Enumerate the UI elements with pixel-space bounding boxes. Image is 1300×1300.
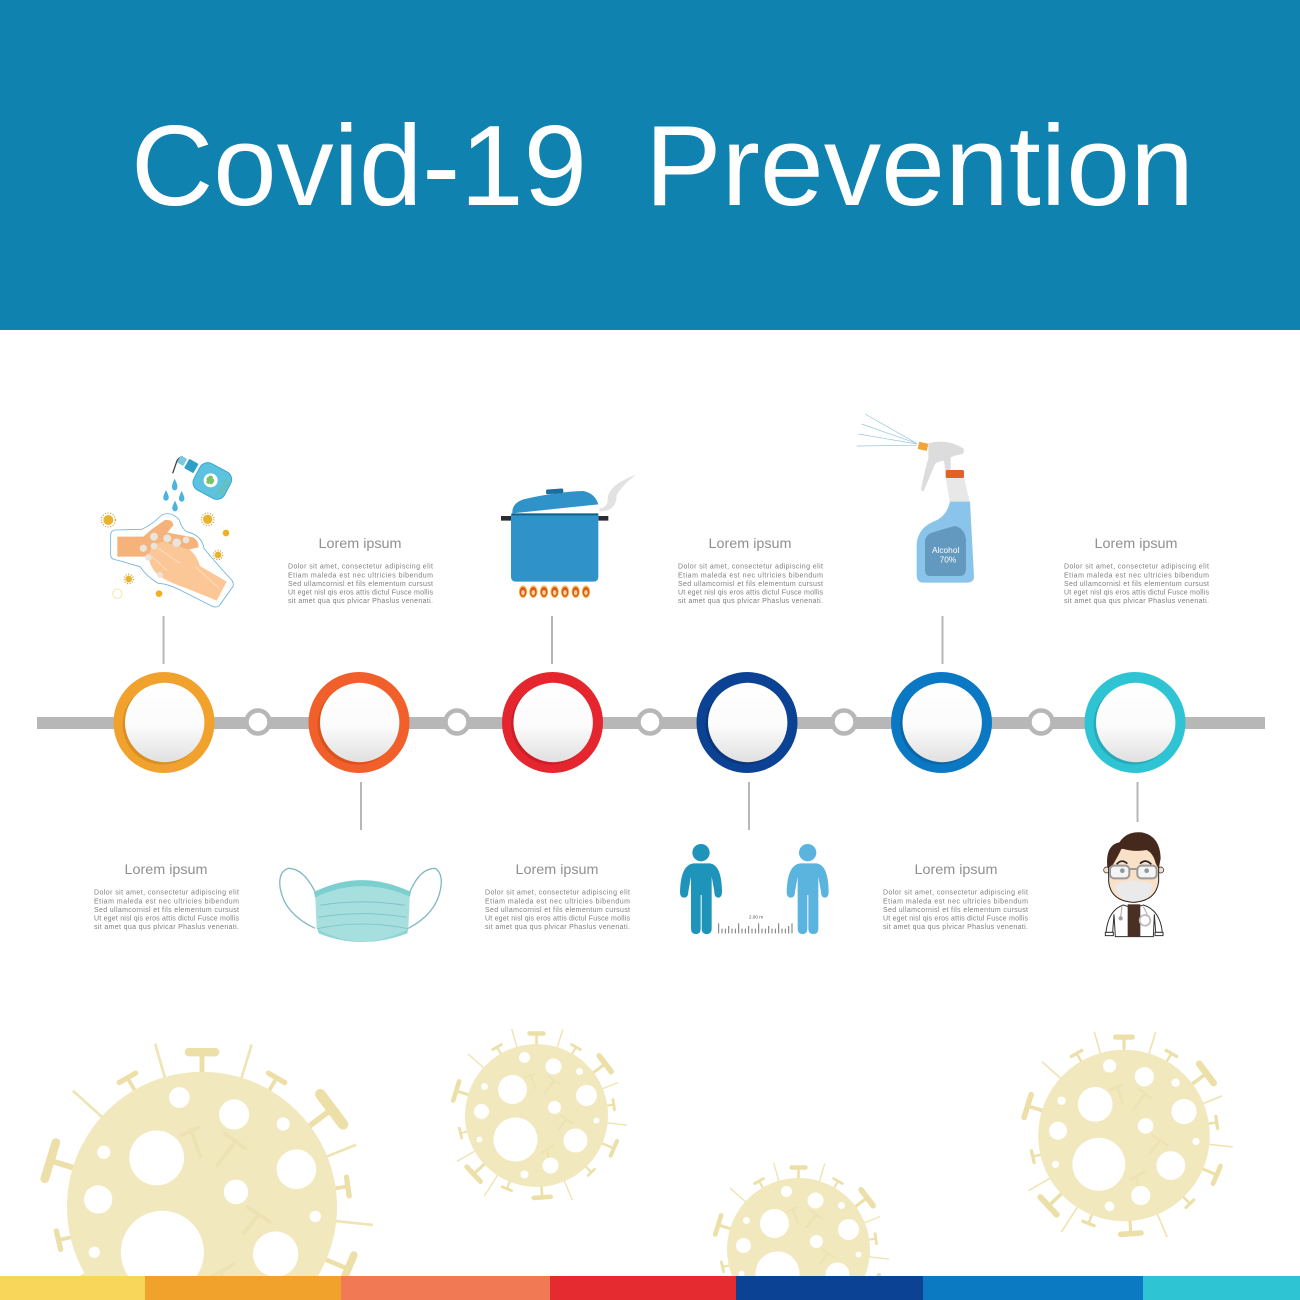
text block: top 3: Lorem ipsum <box>1094 535 1178 551</box>
distance label: 2.00 m <box>749 914 763 919</box>
text block: top 1: Ut eget nisl qis eros attis dictul Fusce mollis <box>288 590 434 596</box>
coat <box>1106 905 1162 937</box>
virus: right <box>1024 1032 1233 1237</box>
icon: surgical mask <box>280 868 441 942</box>
node 4 <box>696 672 798 773</box>
flames <box>519 585 590 598</box>
text block: top 1: Dolor sit amet, consectetur adipiscing elit <box>288 564 433 570</box>
label text <box>932 545 959 565</box>
mask body <box>315 880 410 942</box>
nozzle <box>918 442 928 451</box>
text block: top 3 <box>1064 535 1210 605</box>
icon: social distancing figures <box>680 844 829 934</box>
lid <box>512 491 598 513</box>
pleats <box>317 902 408 929</box>
timeline bar <box>37 717 1265 729</box>
text block: bottom 3: Lorem ipsum <box>914 861 998 877</box>
spray mist <box>857 414 917 446</box>
text block: bottom 3: Sed ullamcornisl et fils elementum cursust <box>883 907 1028 914</box>
text block: bottom 2: Dolor sit amet, consectetur adipiscing elit <box>485 890 630 896</box>
droplets <box>163 479 184 511</box>
back hand <box>117 520 198 557</box>
ears <box>1104 867 1110 873</box>
text block: top 3: Etiam maleda est nec ultricies bibendum <box>1064 572 1209 580</box>
text block: bottom 2 <box>485 861 630 931</box>
title: Covid-19 <box>131 103 587 230</box>
hair <box>1107 832 1161 869</box>
text block: bottom 1 <box>94 861 240 931</box>
virus: lower centre <box>715 1163 889 1298</box>
text block: top 2: sit amet qua qus plvicar Phaslus venenati. <box>678 598 823 605</box>
colour stripe footer <box>0 1276 1300 1300</box>
text block: top 2: Etiam maleda est nec ultricies bibendum <box>678 572 823 580</box>
mask top band <box>314 880 411 897</box>
hand outline <box>111 514 233 607</box>
person right <box>787 844 829 934</box>
text block: top 3: Ut eget nisl qis eros attis dictul Fusce mollis <box>1064 590 1210 596</box>
text block: top 1: Lorem ipsum <box>318 535 402 551</box>
text block: bottom 1: Dolor sit amet, consectetur adipiscing elit <box>94 890 239 896</box>
germs and dots <box>101 513 229 598</box>
text block: bottom 1: Etiam maleda est nec ultricies bibendum <box>94 898 239 906</box>
face <box>1109 848 1159 902</box>
text block: bottom 1: Ut eget nisl qis eros attis dictul Fusce mollis <box>94 916 240 922</box>
text block: bottom 1: Sed ullamcornisl et fils elementum cursust <box>94 907 239 914</box>
title: Prevention <box>645 103 1194 230</box>
label text: 70% <box>940 555 957 565</box>
trigger head <box>921 442 964 492</box>
bottle body <box>917 502 974 583</box>
text block: bottom 3: Etiam maleda est nec ultricies bibendum <box>883 898 1028 906</box>
text block: top 2: Sed ullamcornisl et fils elementum cursust <box>678 581 823 588</box>
connector nodes <box>246 710 1052 734</box>
text block: top 2: Ut eget nisl qis eros attis dictul Fusce mollis <box>678 590 824 596</box>
header banner <box>0 0 1300 330</box>
shirt <box>1128 904 1140 937</box>
text block: bottom 2: Sed ullamcornisl et fils elementum cursust <box>485 907 630 914</box>
eyes <box>1120 868 1125 873</box>
text block: top 2 <box>678 535 824 605</box>
text block: bottom 3: Dolor sit amet, consectetur adipiscing elit <box>883 890 1028 896</box>
text block: top 3: sit amet qua qus plvicar Phaslus venenati. <box>1064 598 1209 605</box>
text block: top 2: Lorem ipsum <box>708 535 792 551</box>
collar <box>946 470 964 478</box>
title <box>131 103 1194 230</box>
sanitizer bottle <box>173 455 235 502</box>
node 3 <box>502 672 603 773</box>
stem lines linking icons to nodes <box>164 616 1138 830</box>
text block: bottom 2: Ut eget nisl qis eros attis dictul Fusce mollis <box>485 916 630 922</box>
mask <box>1115 880 1153 902</box>
handles <box>501 516 608 521</box>
icon: cooking pot <box>501 475 636 598</box>
text block: bottom 3: sit amet qua qus plvicar Phaslus venenati. <box>883 924 1028 931</box>
text block: top 1: sit amet qua qus plvicar Phaslus venenati. <box>288 598 433 605</box>
icon: alcohol spray bottle <box>857 414 974 583</box>
neck <box>946 477 970 503</box>
text block: bottom 1: sit amet qua qus plvicar Phaslus venenati. <box>94 924 239 931</box>
text block: top 2: Dolor sit amet, consectetur adipiscing elit <box>678 564 823 570</box>
text block: top 1: Etiam maleda est nec ultricies bibendum <box>288 572 433 580</box>
text block: top 3: Sed ullamcornisl et fils elementum cursust <box>1064 581 1209 588</box>
text block: top 1: Sed ullamcornisl et fils elementum cursust <box>288 581 433 588</box>
virus: large left <box>45 1044 373 1300</box>
pot body <box>511 515 598 582</box>
soap bubbles <box>140 533 189 578</box>
person left <box>680 844 722 934</box>
front hand <box>148 542 227 601</box>
icon: hand washing with sanitizer <box>101 455 235 607</box>
cuffs <box>1105 932 1163 936</box>
distance ruler <box>719 923 792 933</box>
stethoscope <box>1119 907 1150 926</box>
timeline <box>37 672 1265 773</box>
node 1 <box>114 672 214 773</box>
steam <box>599 475 636 511</box>
text block: bottom 1: Lorem ipsum <box>124 861 208 877</box>
text block: bottom 2: Lorem ipsum <box>516 861 598 877</box>
text block: bottom 2: sit amet qua qus plvicar Phaslus venenati. <box>485 924 630 931</box>
text block: bottom 3 <box>883 861 1028 931</box>
glasses <box>1110 866 1157 878</box>
node 2 <box>308 672 410 773</box>
text block: bottom 2: Etiam maleda est nec ultricies bibendum <box>485 898 630 906</box>
ear loops <box>280 868 441 928</box>
node 5 <box>891 672 992 773</box>
text block: top 1 <box>288 535 434 605</box>
icon: doctor with mask <box>1104 832 1164 937</box>
text block: bottom 3: Ut eget nisl qis eros attis dictul Fusce mollis <box>883 916 1028 922</box>
node 6 <box>1084 672 1186 773</box>
label <box>925 526 966 576</box>
eyebrows <box>1117 861 1151 864</box>
text block: top 3: Dolor sit amet, consectetur adipiscing elit <box>1064 564 1209 570</box>
label text: Alcohol <box>932 545 959 555</box>
virus: upper centre <box>453 1029 627 1200</box>
